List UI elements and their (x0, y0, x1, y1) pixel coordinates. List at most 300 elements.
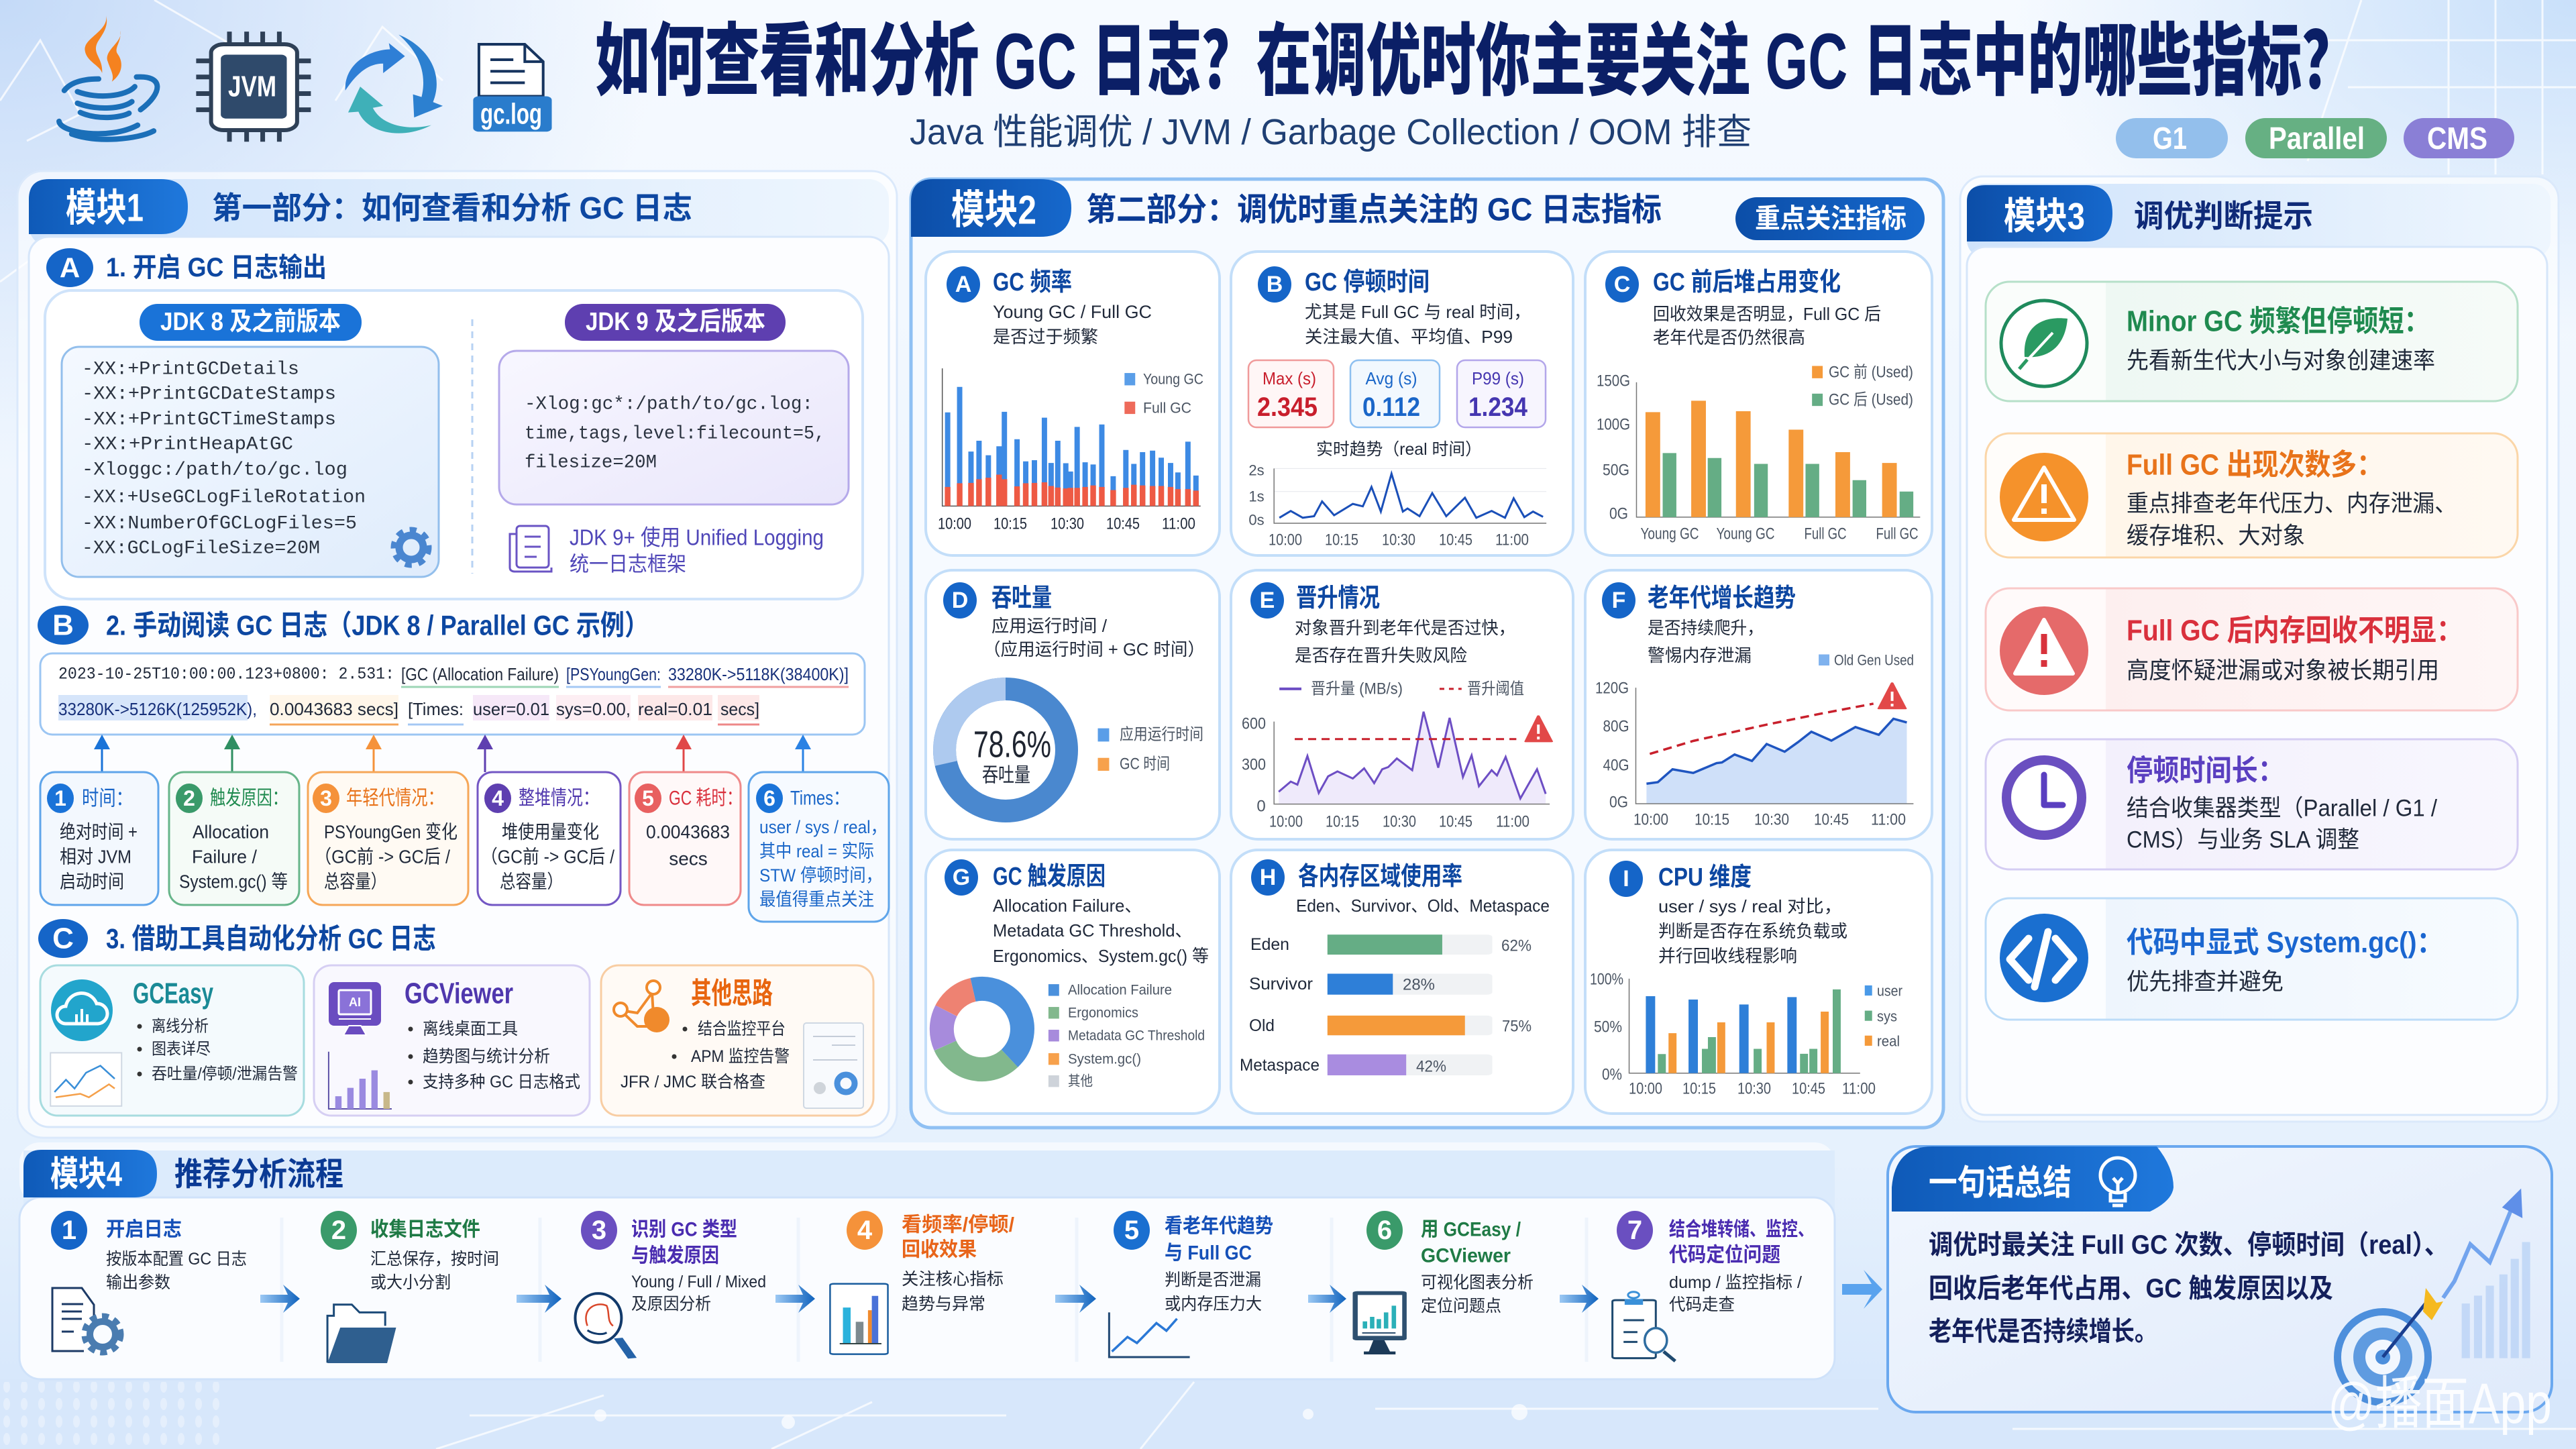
grouped bar chart: GC 前 (Used) (1829, 364, 1913, 381)
card D: throughput (926, 570, 1220, 839)
card E: promotion: 晋升情况 (1296, 584, 1380, 612)
icon: monitor: AI (349, 996, 361, 1009)
CPU bar chart: 0% (1602, 1065, 1622, 1084)
section A heading: A (60, 252, 80, 283)
section C heading: 3. 借助工具自动化分析 GC 日志 (106, 923, 436, 954)
summary text: 老年代是否持续增长。 (1929, 1317, 2157, 1346)
tip: poor reclamation: Full GC 后内存回收不明显： (2127, 614, 2463, 647)
icon: report chart (830, 1284, 888, 1354)
icon: line chart (1109, 1312, 1190, 1357)
JDK 8 code box: -XX:+PrintHeapAtGC (82, 435, 293, 455)
icon: warning orange (2000, 453, 2088, 541)
step 4: 看频率/停顿/ (902, 1214, 1015, 1236)
step 2: 汇总保存，按时间 (370, 1250, 499, 1269)
panel: module 1 (17, 171, 897, 1138)
step 3: 3 (592, 1216, 606, 1245)
stat: max: 2.345 (1257, 392, 1318, 422)
CPU bar chart: 11:00 (1842, 1080, 1876, 1097)
section C heading: C (52, 922, 74, 955)
old gen area chart (1595, 652, 1914, 829)
note 2: trigger reason: Failure / (192, 847, 257, 867)
step 3: Young / Full / Mixed (631, 1273, 766, 1291)
old gen area chart: 10:00 (1633, 810, 1668, 829)
grouped bar chart: Young GC (1641, 525, 1699, 543)
GCEasy features: 图表详尽 (152, 1040, 211, 1059)
step 4: 回收效果 (902, 1238, 977, 1261)
throughput donut: 吞吐量 (982, 765, 1030, 786)
section A heading (46, 248, 327, 287)
card G: GC causes: Ergonomics、System.gc() 等 (993, 946, 1209, 966)
GC log sample: 33280K->5118K(38400K)] (668, 664, 849, 684)
section B heading: B (52, 609, 74, 641)
step 1: 输出参数 (106, 1273, 170, 1292)
card D: throughput: D (952, 588, 968, 613)
header icon: recycle arrows (345, 35, 443, 133)
key metrics pill: 重点关注指标 (1755, 204, 1907, 233)
stacked bar chart: 10:30 (1051, 515, 1084, 533)
JDK 8 pill (140, 304, 362, 341)
grouped bar chart: GC 后 (Used) (1829, 390, 1913, 409)
panel: module 2 (911, 179, 1943, 1128)
step 3: 与触发原因 (631, 1245, 719, 1267)
causes donut: 其他 (1068, 1073, 1093, 1089)
tip: poor reclamation (1986, 588, 2518, 710)
GC log sample: 33280K->5126K(125952K), (58, 699, 257, 719)
JDK 8 code box: -XX:NumberOfGCLogFiles=5 (82, 514, 357, 534)
arrow 2 (517, 1285, 561, 1313)
GC log sample: real=0.01 (638, 699, 712, 719)
old gen area chart: 10:30 (1754, 810, 1789, 829)
real-time trend chart: 0s (1248, 511, 1265, 529)
key metrics pill (1735, 197, 1925, 240)
note 6: times: 最值得重点关注 (759, 890, 874, 910)
stat: max (1248, 360, 1334, 427)
icon: document with gear (52, 1288, 121, 1352)
step 4: 关注核心指标 (902, 1270, 1004, 1289)
stat: max: Max (s) (1263, 368, 1316, 388)
causes donut: Allocation Failure (1068, 982, 1172, 998)
CPU bar chart: 100% (1590, 970, 1623, 989)
summary text: 回收后老年代占用、GC 触发原因以及 (1929, 1274, 2333, 1303)
JDK 9 code box: filesize=20M (525, 452, 657, 474)
icon: magnifier (575, 1293, 633, 1358)
GC log sample: 0.0043683 secs] (270, 699, 398, 719)
GC log sample: 2023-10-25T10:00:00.123+0800: 2.531: (58, 664, 394, 684)
note 6: times: STW 停顿时间， (759, 865, 882, 885)
step 4: 4 (857, 1216, 873, 1245)
usage bars: Eden (1250, 935, 1289, 954)
card D: throughput: 吞吐量 (991, 584, 1052, 612)
promotion line chart (1242, 680, 1552, 830)
JDK 8 pill: JDK 8 及之前版本 (160, 308, 341, 336)
card H: memory regions (1231, 850, 1573, 1114)
tool: GCEasy: GCEasy (133, 977, 213, 1010)
arrow to summary (1842, 1270, 1882, 1309)
collector tags: Parallel (2269, 121, 2365, 156)
note 6: times: 6 (763, 786, 775, 810)
header icon: gc.log file (473, 44, 552, 131)
CPU bar chart: 10:15 (1682, 1080, 1716, 1097)
JDK 9 pill (565, 304, 786, 341)
JDK 8 code box: -Xloggc:/path/to/gc.log (82, 460, 347, 480)
note 2: trigger reason: 2 (183, 786, 195, 810)
arrow 5 (1308, 1285, 1346, 1313)
GC log sample: user=0.01 (473, 699, 549, 719)
icon: clock (2006, 760, 2082, 835)
module 3 heading: 调优判断提示 (2134, 199, 2313, 233)
old gen area chart: 40G (1603, 757, 1629, 774)
module 3 tab (1967, 185, 2112, 241)
step 2 (321, 1211, 499, 1363)
note 2: trigger reason: System.gc() 等 (179, 871, 288, 892)
step 7: 7 (1627, 1216, 1642, 1245)
header icon: JVM chip (196, 32, 311, 142)
card A: GC frequency: A (955, 272, 971, 297)
GCViewer features: 离线桌面工具 (423, 1020, 518, 1038)
promotion line chart: 10:00 (1269, 813, 1303, 830)
GC log sample (40, 653, 865, 735)
step 6: 定位问题点 (1421, 1297, 1501, 1316)
usage bars: 28% (1403, 975, 1435, 994)
icon: warning red (2000, 606, 2088, 695)
arrow 1 (260, 1285, 300, 1313)
card H: memory regions: 各内存区域使用率 (1298, 863, 1462, 891)
note 1: time: 相对 JVM (60, 847, 131, 867)
card B: GC pause: GC 停顿时间 (1305, 268, 1430, 297)
note 5: GC duration: 0.0043683 (646, 821, 730, 843)
stat: avg: Avg (s) (1366, 368, 1417, 388)
step 7: 代码定位问题 (1669, 1244, 1780, 1267)
card F: old generation trend: 老年代增长趋势 (1648, 584, 1796, 612)
section B heading (38, 606, 649, 645)
CPU bar chart: user (1877, 982, 1902, 1000)
causes donut (942, 982, 1205, 1089)
grouped bar chart: Full GC (1805, 525, 1846, 543)
grouped bar chart: 100G (1597, 416, 1630, 433)
mini bar chart (329, 1052, 392, 1109)
card G: GC causes (926, 850, 1220, 1114)
promotion line chart: 600 (1242, 715, 1266, 733)
summary text (1929, 1230, 2449, 1346)
promotion line chart: 300 (1242, 755, 1266, 774)
old gen area chart: 0G (1609, 793, 1628, 812)
note 4: whole heap: （GC前 -> GC后 / (481, 847, 614, 867)
JDK 8 code box: -XX:+PrintGCTimeStamps (82, 409, 336, 431)
section A box (45, 290, 863, 599)
note 4: whole heap: 4 (492, 786, 504, 810)
annotation arrows (94, 735, 811, 772)
card G: GC causes: Allocation Failure、 (993, 896, 1142, 916)
note 6: times: 其中 real = 实际 (759, 841, 874, 861)
promotion line chart: 10:45 (1439, 813, 1472, 830)
step 2: 或大小分割 (370, 1273, 451, 1292)
note 1: time: 1 (54, 786, 66, 810)
grouped bar chart: 0G (1609, 504, 1628, 523)
card A: GC frequency (926, 252, 1220, 555)
step 7: dump / 监控指标 / (1669, 1273, 1802, 1292)
usage bars: 75% (1502, 1017, 1532, 1036)
step 1 (51, 1211, 247, 1352)
real-time trend chart: 2s (1248, 462, 1265, 479)
unified logging note: 统一日志框架 (570, 553, 686, 576)
tip: explicit System.gc: 代码中显式 System.gc()： (2127, 926, 2443, 959)
module 2 tab: 模块2 (951, 188, 1036, 232)
growth chart decoration (2443, 1189, 2526, 1358)
CPU bar chart: 10:00 (1629, 1080, 1662, 1097)
unified logging note: JDK 9+ 使用 Unified Logging (570, 525, 824, 550)
card E: promotion: 对象晋升到老年代是否过快， (1295, 618, 1515, 638)
note 5: GC duration: GC 耗时： (669, 788, 742, 809)
old gen area chart: 80G (1603, 718, 1629, 735)
summary text: 调优时最关注 Full GC 次数、停顿时间（real）、 (1929, 1230, 2449, 1260)
note 1: time: 时间： (82, 786, 133, 810)
real-time trend chart: 11:00 (1495, 531, 1529, 549)
stat: avg: 0.112 (1362, 392, 1420, 422)
card E: promotion: E (1260, 588, 1275, 613)
icon: clipboard with magnifier (1613, 1292, 1675, 1361)
throughput donut: GC 时间 (1120, 755, 1170, 773)
usage bars (1240, 934, 1532, 1076)
module 1 tab: 模块1 (66, 186, 144, 229)
card B: GC pause (1231, 252, 1573, 555)
throughput donut (945, 689, 1203, 811)
causes donut: Ergonomics (1068, 1005, 1138, 1021)
note 4: whole heap: 总容量） (500, 871, 563, 892)
collector tags (2116, 118, 2514, 158)
note 4: whole heap: 堆使用量变化 (502, 821, 599, 843)
step 5: 与 Full GC (1165, 1242, 1252, 1264)
JDK 8 code box (62, 347, 439, 577)
CPU bar chart: 10:45 (1792, 1080, 1825, 1097)
step 1: 按版本配置 GC 日志 (106, 1250, 247, 1269)
JDK 9 code box: time,tags,level:filecount=5, (525, 424, 825, 444)
tip: frequent full GC (1986, 433, 2518, 557)
step 6: 6 (1377, 1216, 1392, 1245)
icon: monitor (329, 982, 381, 1035)
usage bars: Survivor (1249, 975, 1313, 994)
card G: GC causes: G (953, 865, 970, 890)
note 3: young generation: 3 (320, 786, 332, 810)
real-time trend chart: 10:00 (1269, 531, 1302, 549)
step 5: 5 (1124, 1216, 1139, 1245)
GC log sample: [Times: (408, 699, 464, 719)
module 4 tab: 模块4 (50, 1155, 122, 1194)
card G: GC causes: GC 触发原因 (993, 863, 1106, 891)
usage bars: Old (1249, 1016, 1275, 1035)
CPU bar chart: 10:30 (1737, 1080, 1771, 1097)
card H: memory regions: Eden、Survivor、Old、Metaspace (1296, 896, 1550, 916)
icon: light bulb (2100, 1158, 2135, 1205)
usage bars: 62% (1501, 936, 1532, 955)
card C: heap before and after GC: C (1614, 272, 1630, 297)
throughput donut: 应用运行时间 (1120, 726, 1203, 743)
GC log sample: secs] (720, 699, 759, 719)
CPU bar chart: 50% (1594, 1018, 1622, 1036)
tip: frequent full GC: 重点排查老年代压力、内存泄漏、 (2127, 491, 2457, 517)
step 2: 收集日志文件 (370, 1218, 480, 1241)
note 4: whole heap (478, 772, 621, 905)
GCViewer features: 支持多种 GC 日志格式 (423, 1073, 580, 1091)
mini line chart (50, 1053, 121, 1106)
stacked bar chart (938, 368, 1203, 533)
section B heading: 2. 手动阅读 GC 日志（JDK 8 / Parallel GC 示例） (106, 609, 649, 641)
CPU bar chart: real (1877, 1033, 1900, 1049)
card F: old generation trend: F (1612, 588, 1625, 613)
note 5: GC duration: secs (669, 848, 708, 869)
card I: CPU dimension: 并行回收线程影响 (1658, 946, 1797, 966)
step 5: 判断是否泄漏 (1165, 1271, 1261, 1289)
JDK 9 code box (499, 351, 849, 504)
card G: GC causes: Metadata GC Threshold、 (993, 920, 1192, 941)
card I: CPU dimension: 判断是否存在系统负载或 (1658, 921, 1847, 941)
tip: long pause: CMS）与业务 SLA 调整 (2127, 826, 2359, 853)
step 4 (830, 1211, 1015, 1354)
step 7: 结合堆转储、监控、 (1669, 1218, 1814, 1240)
icon: cloud (51, 979, 113, 1041)
note 2: trigger reason: 触发原因： (210, 788, 288, 809)
card F: old generation trend: 是否持续爬升， (1648, 618, 1764, 638)
grouped bar chart (1597, 364, 1920, 543)
step 5: 看老年代趋势 (1165, 1216, 1273, 1237)
other approaches list: APM 监控告警 (691, 1047, 790, 1066)
tip: long pause: 结合收集器类型（Parallel / G1 / (2127, 796, 2437, 821)
tip: minor GC: Minor GC 频繁但停顿短： (2127, 305, 2430, 338)
module 2 tab (911, 179, 1071, 237)
other approaches list: JFR / JMC 联合格查 (621, 1073, 765, 1091)
card D: throughput: （应用运行时间 + GC 时间） (983, 639, 1205, 659)
module 4 tab (23, 1150, 157, 1197)
card F: old generation trend: 警惕内存泄漏 (1648, 645, 1752, 665)
CPU bar chart: sys (1877, 1008, 1897, 1025)
card C: heap before and after GC: 老年代是否仍然很高 (1653, 327, 1805, 347)
GC log sample: [GC (Allocation Failure) (401, 664, 559, 684)
panel: module 3 (1960, 176, 2559, 1122)
GCViewer features: 趋势图与统计分析 (423, 1047, 550, 1066)
panel: module 4 (19, 1142, 1835, 1379)
old gen area chart: Old Gen Used (1834, 652, 1914, 668)
card I: CPU dimension: CPU 维度 (1658, 863, 1752, 892)
panel: one-line summary (1888, 1146, 2552, 1412)
note 2: trigger reason: Allocation (193, 821, 269, 843)
promotion line chart: 0 (1256, 797, 1266, 816)
arrow 6 (1560, 1285, 1599, 1313)
other approaches list (621, 1020, 790, 1091)
module 2 heading: 第二部分：调优时重点关注的 GC 日志指标 (1086, 192, 1662, 228)
stat: avg (1350, 360, 1440, 427)
grouped bar chart: 150G (1597, 372, 1630, 390)
section C heading (38, 919, 436, 958)
module 4 heading: 推荐分析流程 (174, 1157, 343, 1193)
usage bars: 42% (1416, 1057, 1446, 1076)
note 3: young generation (308, 772, 468, 905)
tool: GCViewer (314, 965, 590, 1116)
old gen area chart: 10:15 (1695, 810, 1729, 829)
icon: leaf (2001, 301, 2087, 386)
module 3 tab: 模块3 (2004, 195, 2085, 237)
tip: long pause: 停顿时间长： (2127, 754, 2284, 788)
note 6: times (749, 772, 889, 922)
JDK 8 code box: -XX:+UseGCLogFileRotation (82, 487, 366, 508)
step 1: 1 (62, 1216, 76, 1245)
note 3: young generation: PSYoungGen 变化 (324, 821, 458, 843)
step 4: 趋势与异常 (902, 1295, 985, 1313)
tip: long pause (1986, 739, 2518, 869)
icon: monitor dashboard (1352, 1291, 1407, 1354)
stacked bar chart: 11:00 (1162, 515, 1195, 533)
card A: GC frequency: GC 频率 (993, 268, 1072, 297)
step 1: 开启日志 (106, 1218, 182, 1241)
real-time trend chart: 10:45 (1439, 531, 1472, 549)
tool: GCViewer: GCViewer (405, 977, 513, 1010)
stat: p99: 1.234 (1468, 392, 1528, 422)
icon: network nodes (614, 981, 669, 1032)
tip: explicit System.gc (1986, 898, 2518, 1020)
card F: old generation trend (1585, 570, 1932, 839)
stacked bar chart: Young GC (1143, 370, 1203, 388)
GC log sample: sys=0.00, (556, 699, 631, 719)
arrow 3 (775, 1285, 815, 1313)
throughput donut: 78.6% (973, 723, 1051, 765)
header icon: java cup (59, 15, 157, 140)
GCEasy features: 吞吐量/停顿/泄漏告警 (152, 1065, 298, 1083)
grouped bar chart: Full GC (1876, 525, 1919, 543)
card C: heap before and after GC: 回收效果是否明显，Full GC 后 (1653, 304, 1881, 324)
tip: minor GC (1986, 282, 2518, 401)
icon: gear (394, 530, 429, 565)
step 5: 或内存压力大 (1165, 1295, 1262, 1313)
CPU bar chart (1590, 970, 1902, 1097)
JDK 8 code box: -XX:GCLogFileSize=20M (82, 538, 320, 559)
GCViewer features (408, 1020, 580, 1091)
step 5 (1109, 1211, 1273, 1357)
card I: CPU dimension (1585, 850, 1932, 1114)
stacked bar chart: 10:45 (1106, 515, 1140, 533)
module 1 tab (29, 179, 188, 234)
JDK 8 code box: -XX:+PrintGCDateStamps (82, 384, 336, 405)
note 2: trigger reason (169, 772, 299, 905)
old gen area chart: 11:00 (1871, 810, 1906, 829)
card A: GC frequency: Young GC / Full GC (993, 302, 1152, 322)
tip: minor GC: 先看新生代大小与对象创建速率 (2127, 347, 2435, 374)
header icon: JVM chip: JVM (228, 70, 276, 103)
stacked bar chart: Full GC (1143, 400, 1191, 416)
old gen area chart: 120G (1595, 679, 1629, 698)
causes donut: Metadata GC Threshold (1068, 1028, 1205, 1044)
module 1 heading: 第一部分：如何查看和分析 GC 日志 (212, 191, 692, 225)
stacked bar chart: 10:15 (994, 515, 1027, 533)
card B: GC pause: 尤其是 Full GC 与 real 时间， (1305, 302, 1531, 322)
summary tab (1892, 1146, 2174, 1212)
real-time trend chart: 10:30 (1382, 531, 1415, 549)
step 6: 可视化图表分析 (1421, 1273, 1534, 1292)
GCEasy features: 离线分析 (152, 1017, 209, 1036)
JDK 9 pill: JDK 9 及之后版本 (586, 308, 765, 336)
other approaches list: 结合监控平台 (698, 1020, 786, 1038)
step 3 (575, 1211, 766, 1358)
note 1: time (40, 772, 158, 905)
promotion line chart: 晋升量 (MB/s) (1311, 680, 1403, 698)
card E: promotion: 是否存在晋升失败风险 (1295, 645, 1467, 665)
tip: frequent full GC: Full GC 出现次数多： (2127, 448, 2383, 482)
note 1: time: 绝对时间 + (60, 821, 138, 843)
card I: CPU dimension: user / sys / real 对比， (1658, 896, 1842, 916)
tool: GCEasy (40, 965, 304, 1116)
collector tags: CMS (2427, 121, 2487, 156)
step 3: 及原因分析 (631, 1295, 711, 1313)
step 7: 代码走查 (1669, 1295, 1735, 1314)
promotion line chart: 10:15 (1326, 813, 1359, 830)
card A: GC frequency: 是否过于频繁 (993, 327, 1098, 347)
